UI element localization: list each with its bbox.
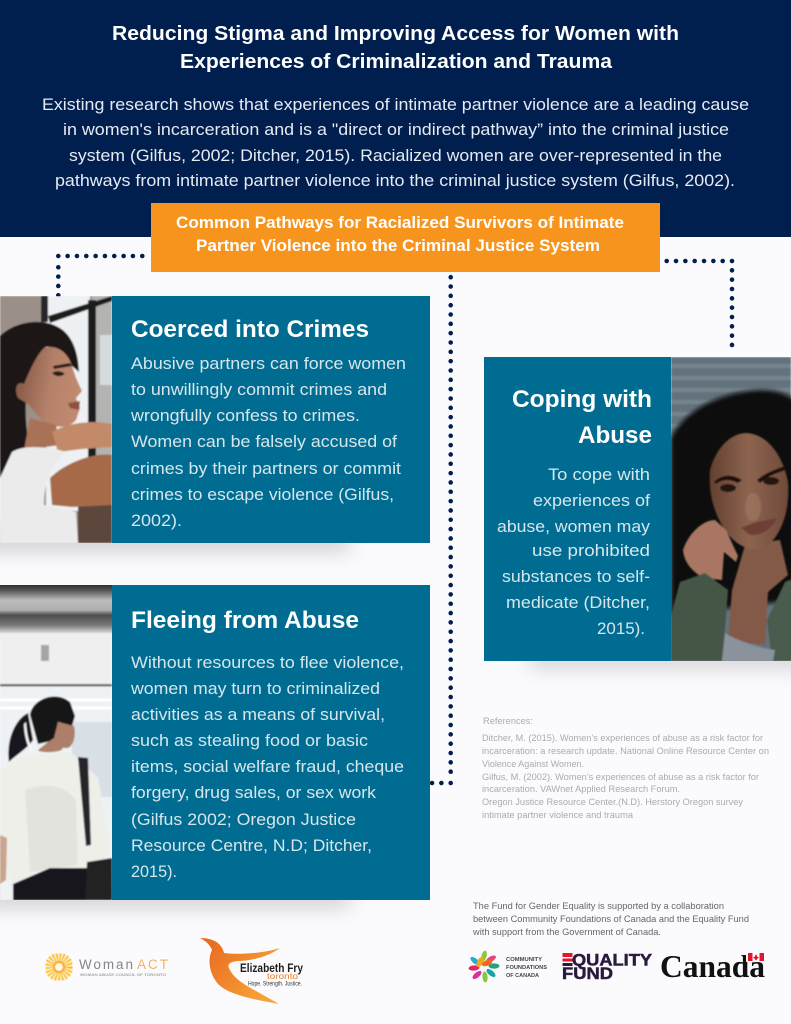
body text: 2015). [131,862,177,881]
logo: Canada wordmark: Canada [660,948,765,984]
intro paragraph: in women's incarceration and is a "direct or indirect pathway” into the criminal justice [63,120,729,139]
intro paragraph: system (Gilfus, 2002; Ditcher, 2015). Racialized women are over-represented in the [69,146,722,165]
intro paragraph: Existing research shows that experiences of intimate partner violence are a leading cause [42,95,749,114]
orange subtitle banner [151,203,660,272]
body text: activities as a means of survival, [131,705,385,724]
photo: woman in station [0,585,112,900]
icon: flag [746,951,766,962]
logo: WomanACT: WOMAN ABUSE COUNCIL OF TORONTO [80,973,166,977]
references: incarceration. VAWnet Applied Research Forum. [482,784,680,795]
body text: experiences of [533,491,650,510]
photo: woman at window [0,296,112,543]
funding statement: The Fund for Gender Equality is supported by a collaboration [473,901,724,912]
funding statement: between Community Foundations of Canada and the Equality Fund [473,914,749,925]
references: intimate partner violence and trauma [482,810,634,821]
logo: Community Foundations of Canada [468,950,548,983]
references: Ditcher, M. (2015). Women’s experiences of abuse as a risk factor for [482,733,763,744]
body text [497,465,651,638]
orange subtitle banner: Partner Violence into the Criminal Justice System [196,236,600,255]
heading: Abuse [578,422,652,449]
logo: WomanACT: ACT [137,957,168,972]
logo: Equality Fund: QUALITY [572,952,652,970]
logo: Equality Fund: FUND [562,965,613,983]
body text: women may turn to criminalized [130,679,380,698]
body text: to unwillingly commit crimes and [131,380,387,399]
body text: substances to self- [502,567,650,586]
heading: Coping with [512,386,652,413]
logo: Elizabeth Fry Toronto [200,938,304,1004]
logo: Elizabeth Fry Toronto: Hope. Strength. Justice. [248,982,302,988]
heading [512,386,652,449]
logo: WomanACT [50,957,168,977]
body text: forgery, drug sales, or sex work [131,783,377,802]
logo: Elizabeth Fry Toronto: Elizabeth Fry [240,963,304,975]
icon: sun [50,958,68,976]
logo: Community Foundations of Canada: COMMUNITY [506,957,543,963]
body text: abuse, women may [497,517,651,536]
references: Violence Against Women. [482,759,584,770]
panel: fleeing from abuse [0,585,430,900]
funding statement [472,901,749,938]
body text: items, social welfare fraud, cheque [131,757,404,776]
header banner [0,0,791,237]
body text: wrongfully confess to crimes. [130,406,360,425]
title: Experiences of Criminalization and Trauma [180,51,613,73]
references: Oregon Justice Resource Center.(N.D). Herstory Oregon survey [482,797,743,808]
references [482,716,769,821]
logo: Equality Fund [562,952,652,983]
title: Reducing Stigma and Improving Access for Women with [112,23,679,45]
body text: 2015). [597,619,645,638]
body text: Resource Centre, N.D; Ditcher, [131,836,372,855]
body text: crimes by their partners or commit [131,459,401,478]
icon: orange bird [200,938,280,1004]
body text: Without resources to flee violence, [131,653,404,672]
card shadows [0,528,791,908]
title [112,23,679,73]
funding statement: with support from the Government of Canada. [472,927,661,938]
icon: pinwheel [468,950,500,983]
dotted connector: centre [431,277,451,783]
body text: 2002). [131,511,182,530]
logo: Community Foundations of Canada: OF CANADA [506,973,539,979]
body text: such as stealing food or basic [131,731,369,750]
body text: To cope with [548,465,650,484]
references: Gilfus, M. (2002). Women’s experiences of abuse as a risk factor for [482,772,759,783]
logo: Elizabeth Fry Toronto: toronto [267,971,298,981]
references: References: [483,716,533,727]
body text: crimes to escape violence (Gilfus, [131,485,394,504]
body text [130,354,406,530]
panel: coping with abuse [484,357,791,661]
body text: Abusive partners can force women [131,354,406,373]
intro paragraph [42,95,749,190]
panel: coerced into crimes [0,296,430,543]
dotted connector: right [667,261,732,354]
body text: use prohibited [532,541,650,560]
intro paragraph: pathways from intimate partner violence into the criminal justice system (Gilfus, 2002). [55,171,735,190]
references: incarceration: a research update. National Online Resource Center on [482,746,769,757]
body text: Women can be falsely accused of [131,432,397,451]
photo: woman with curly hair [671,357,791,661]
heading: Coerced into Crimes [131,316,369,343]
body text: (Gilfus 2002; Oregon Justice [131,810,356,829]
heading: Fleeing from Abuse [131,607,359,634]
logo: WomanACT: Woman [79,957,133,972]
body text: medicate (Ditcher, [506,593,650,612]
body text [130,653,404,881]
logo: Community Foundations of Canada: FOUNDATIONS [506,965,548,971]
dotted connector: left [58,256,150,297]
orange subtitle banner: Common Pathways for Racialized Survivors of Intimate [176,213,624,232]
